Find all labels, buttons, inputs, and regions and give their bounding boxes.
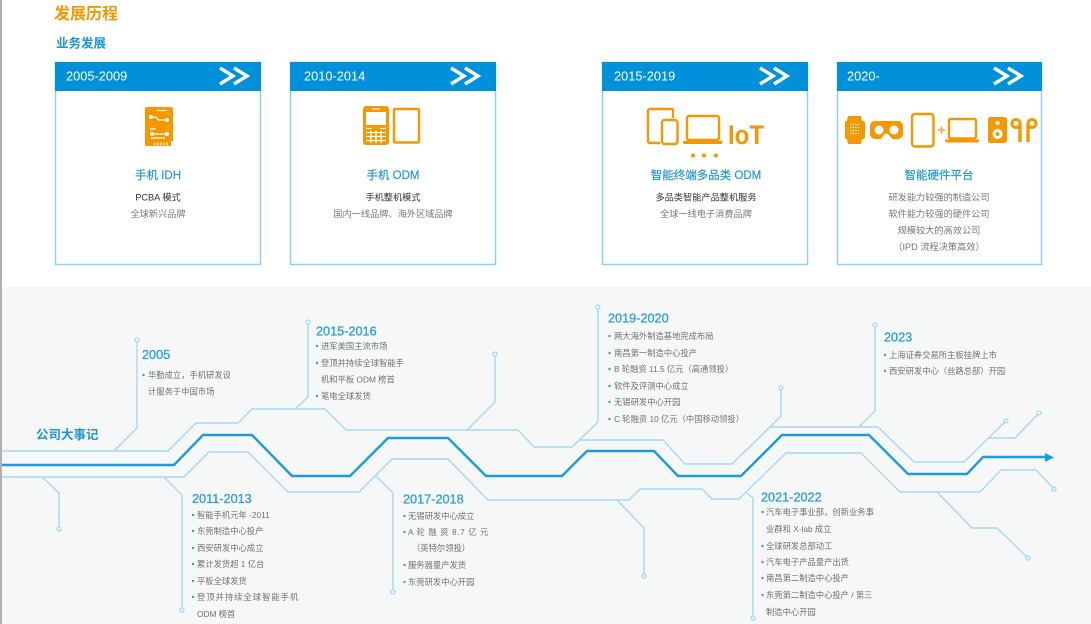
heading: company milestones: 公司大事记 [36,427,99,442]
panel: 2015-2019 card: 多品类智能产品整机服务 [655,192,757,202]
text block: 2005: 2005 [142,348,170,362]
panel: 2015-2019 card [602,62,808,264]
panel: 2005-2009 card: 2005-2009 [66,68,127,84]
text block: 2019-2020: 2019-2020 [608,312,669,326]
panel: 2020- card: 软件能力较强的硬件公司 [888,208,990,219]
text block: 2019-2020: B 轮融资 11.5 亿元（高通领投） [614,364,733,374]
text block: 2017-2018: 无锡研发中心成立 [408,511,474,521]
text block: 2011-2013: 登顶并持续全球智能手机 [197,592,299,602]
text block: 2017-2018: 2017-2018 [403,492,464,506]
branch lines [42,322,1039,618]
icon: devices and IoT: IoT [728,120,764,150]
lower trace [2,452,1054,500]
panel: 2015-2019 card: 2015-2019 [614,68,675,84]
text block: 2017-2018 [403,492,489,587]
text block: 2023 [884,330,1005,376]
text block: 2021-2022: 东莞第二制造中心投产 / 第三 [766,590,872,600]
title: 发展历程 [54,4,118,23]
panel: 2005-2009 card: 手机 IDH [135,168,181,182]
text block: 2011-2013: 2011-2013 [192,492,252,506]
text block: 2019-2020: 南昌第一制造中心投产 [614,348,697,358]
text block: 2017-2018: A 轮 融 资 8.7 亿 元 [408,527,489,537]
text block: 2021-2022: 南昌第二制造中心投产 [766,573,849,583]
icon: smart hardware set [845,114,1036,146]
chart: circuit timeline [2,305,1056,620]
icon: circuit board [145,107,173,146]
text block: 2017-2018: 服务器量产发货 [408,560,466,570]
text block: 2011-2013: 累计发货超 1 亿台 [197,559,264,569]
text block: 2021-2022: 制造中心开园 [766,607,816,617]
panel: 2010-2014 card: 手机整机模式 [365,192,421,202]
text block: 2005: 计服务于中国市场 [148,386,214,396]
text block: 2021-2022: 业群和 X-lab 成立 [766,524,831,534]
text block: 2015-2016 [316,324,404,401]
text block: 2015-2016: 进军美国主流市场 [321,341,387,351]
panel: 2010-2014 card: 国内一线品牌、海外区域品牌 [333,208,453,219]
arrow head [1045,453,1054,462]
text block: 2015-2016: 机和平板 ODM 榜首 [321,374,395,384]
upper trace right [579,421,1006,464]
panel: 2020- card: （IPD 流程决策高效） [893,241,985,252]
text block: 2015-2016: 2015-2016 [316,324,377,338]
text block: 2019-2020: 两大海外制造基地完成布局 [614,331,714,341]
text block: 2021-2022: 全球研发总部动工 [766,541,832,551]
text block: 2023: 上海证券交易所主板挂牌上市 [889,350,997,360]
text block: 2011-2013 [192,492,299,619]
text block: 2005 [142,348,231,396]
text block: 2021-2022 [761,490,874,617]
text block: 2011-2013: 智能手机元年 -2011 [197,510,270,520]
upper trace [2,307,598,451]
text block: 2021-2022: 2021-2022 [761,490,822,504]
text block: 2011-2013: 西安研发中心成立 [197,543,263,553]
text block: 2019-2020 [608,312,744,424]
text block: 2017-2018: 东莞研发中心开园 [408,577,474,587]
text block: 2011-2013: 平板全球发货 [197,576,247,586]
panel: 2010-2014 card: 2010-2014 [304,68,365,84]
panel: 2005-2009 card: 全球新兴品牌 [130,208,186,219]
text block: 2019-2020: C 轮融资 10 亿元（中国移动领投） [614,414,744,424]
main trace [2,435,1048,476]
panel: 2005-2009 card [55,62,261,264]
panel: 2010-2014 card [290,62,496,264]
text block: 2017-2018: （英特尔领投） [412,543,470,553]
text block: 2015-2016: 笔电全球发货 [321,391,371,401]
icon: devices and IoT [648,109,764,158]
panel: 2020- card: 智能硬件平台 [904,168,974,182]
text block: 2011-2013: 东莞制造中心投产 [197,526,263,536]
text block: 2023: 西安研发中心（丝路总部）开园 [889,366,1005,376]
text block: 2019-2020: 软件及评测中心成立 [614,381,689,391]
text block: 2021-2022: 汽车电子产品量产出货 [766,557,849,567]
panel: 2020- card [837,62,1042,264]
panel: 2020- card: 2020- [847,68,880,84]
text block: 2021-2022: 汽车电子事业部，创新业务事 [766,507,874,517]
icon: phone and tablet [363,106,419,145]
text block: 2023: 2023 [884,330,912,344]
text block: 2005: 华勤成立，手机研发设 [148,370,231,380]
text block: 2011-2013: ODM 榜首 [197,609,235,619]
panel: 2005-2009 card: PCBA 模式 [135,192,181,202]
text block: 2015-2016: 登顶并持续全球智能手 [321,358,404,368]
panel: 2020- card: 研发能力较强的制造公司 [888,192,990,202]
panel: 2015-2019 card: 智能终端多品类 ODM [651,168,761,182]
heading: business development: 业务发展 [56,36,107,50]
end nodes [135,338,139,342]
panel: 2020- card: 规模较大的高效公司 [898,224,980,236]
panel: 2010-2014 card: 手机 ODM [366,168,420,182]
panel: 2015-2019 card: 全球一线电子消费品牌 [660,208,752,219]
text block: 2019-2020: 无锡研发中心开园 [614,397,680,407]
